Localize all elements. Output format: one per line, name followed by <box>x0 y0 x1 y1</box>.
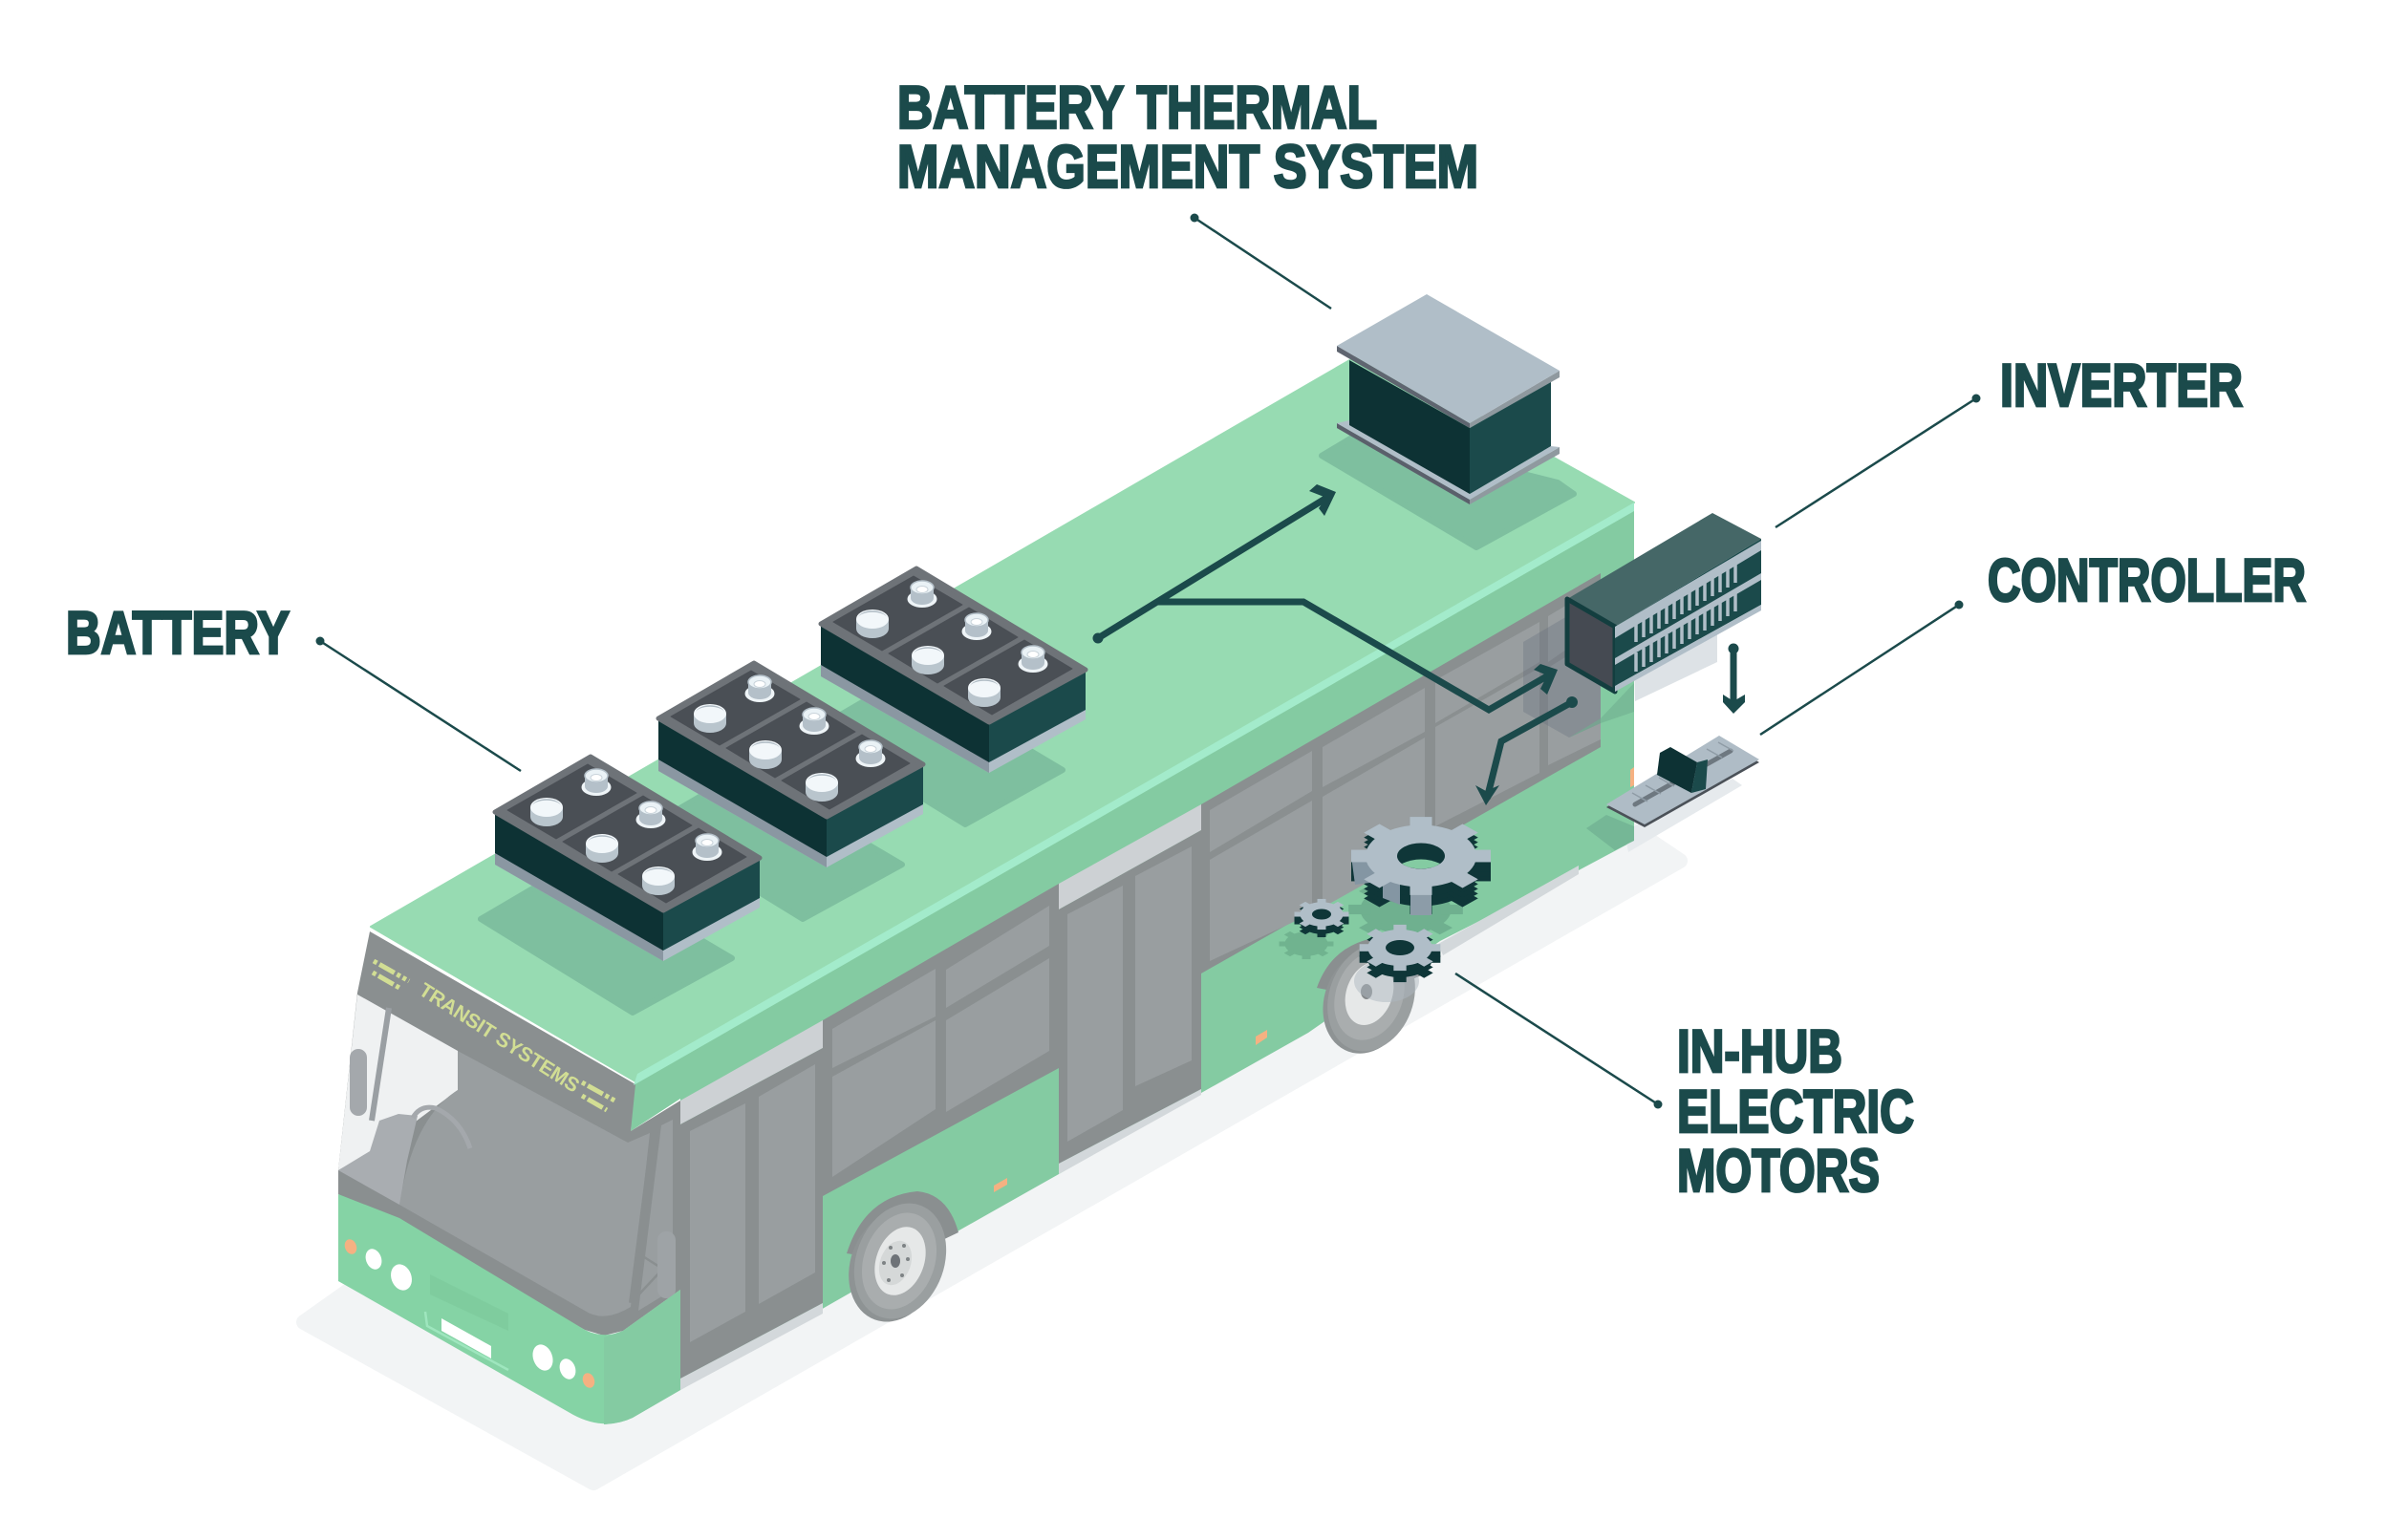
side marker lights <box>994 767 1634 1192</box>
wheel gear shadow <box>1354 960 1419 1002</box>
rear windows <box>1201 573 1601 973</box>
leader: inverter <box>1776 394 1980 527</box>
front windows <box>823 884 1059 1196</box>
arrow: inverter to controller <box>1723 644 1745 714</box>
lights <box>343 1237 596 1390</box>
arrow: battery to inverter <box>1157 602 1558 710</box>
grille <box>430 1274 508 1331</box>
bottom sill strip <box>1438 866 1579 955</box>
front wheel <box>833 1190 961 1335</box>
battery 1 <box>495 757 760 961</box>
leader: motors <box>1455 973 1663 1108</box>
rear wheel <box>1309 930 1430 1066</box>
inverter cast shadow on side <box>1523 594 1717 738</box>
label: in-hub electric motors: ELECTRIC <box>1677 1079 1914 1145</box>
battery shadows on roof <box>481 676 1063 1013</box>
bus body side <box>631 503 1634 1390</box>
big gear <box>1351 817 1491 915</box>
arrow: battery to thermal system <box>1093 484 1336 644</box>
small gear <box>1295 899 1348 937</box>
leader: thermal system <box>1191 214 1331 309</box>
label: battery thermal management system: BATTERY THERMAL <box>897 75 1377 141</box>
label: battery thermal management system: MANAGEMENT SYSTEM <box>897 134 1478 201</box>
label: in-hub electric motors: IN-HUB <box>1677 1018 1842 1085</box>
label: battery: BATTERY <box>66 600 290 667</box>
glass <box>338 995 458 1170</box>
roof edge highlight <box>634 503 1634 1085</box>
inverter <box>1567 513 1761 692</box>
small gear shadow <box>1280 929 1333 959</box>
battery 2 <box>658 663 923 867</box>
battery 3 <box>821 568 1086 773</box>
destination sign: TRANSIT SYSTEMS <box>415 979 583 1097</box>
controller <box>1586 736 1759 852</box>
leader: controller <box>1760 600 1963 735</box>
middle door <box>1059 804 1201 1174</box>
arrow: inverter to motors <box>1475 696 1578 805</box>
wheel gear <box>1360 925 1440 982</box>
label: inverter: INVERTER <box>2000 353 2243 419</box>
label: in-hub electric motors <box>1677 1018 1914 1205</box>
dashboard <box>338 1114 418 1205</box>
label: battery thermal management system <box>897 75 1478 201</box>
left mirror <box>350 1049 367 1116</box>
windshield pane <box>399 1051 650 1316</box>
battery thermal management system unit <box>1322 294 1574 547</box>
pillars <box>372 1008 389 1121</box>
front door <box>680 1020 823 1390</box>
ground shadow <box>304 823 1680 1483</box>
destination sign <box>373 961 616 1110</box>
bus cab and windshield <box>338 931 680 1336</box>
right mirror <box>633 1231 676 1301</box>
roof <box>371 352 1634 1081</box>
leader: battery <box>315 636 521 771</box>
licence plate <box>441 1318 491 1358</box>
big gear shadow <box>1348 879 1463 940</box>
label: in-hub electric motors: MOTORS <box>1677 1138 1880 1205</box>
bus front bumper <box>338 1194 680 1424</box>
